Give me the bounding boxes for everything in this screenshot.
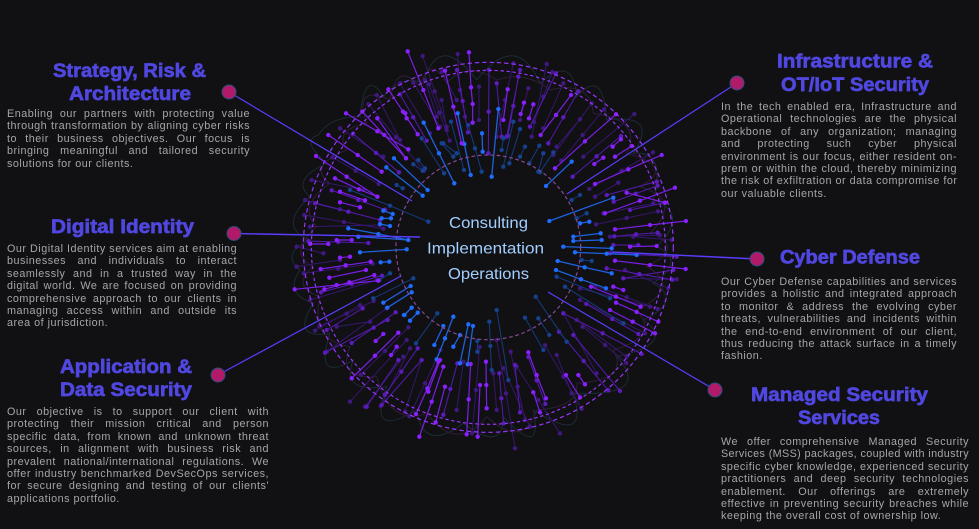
text: Cyber Defense description: fashion. — [721, 350, 763, 362]
text: Application description — [7, 406, 269, 505]
connector: Digital Identity — [234, 234, 420, 237]
text: Infrastructure description: backbone of any organization; managing — [721, 126, 957, 138]
node: Managed Security — [708, 383, 722, 397]
text: Digital Identity description: seamlessly and in a trusted way in the — [7, 268, 237, 280]
text: Application description: prevalent national/international regulations. We — [7, 456, 269, 468]
text: Infrastructure description: the risk of exfiltration or data compromise for — [721, 175, 958, 187]
dashed rings — [303, 62, 673, 432]
connector: Application & Data Security — [218, 276, 401, 375]
connector: Infrastructure & OT/IoT Security — [567, 83, 737, 194]
text: Application description: protecting their mission critical and person — [7, 418, 269, 430]
text: Strategy description: to their business objectives. Our focus is — [7, 133, 250, 145]
center labels: Implementation — [427, 240, 544, 258]
center labels: Operations — [448, 266, 529, 283]
text: Digital Identity description: businesses and individuals to interact — [7, 255, 237, 267]
text: Infrastructure description: environment is our focus, either resident on- — [721, 151, 957, 163]
heading: Managed Security Services: Services — [798, 407, 880, 429]
text: Infrastructure description: our valuable clients. — [721, 188, 827, 200]
node: Application — [211, 368, 225, 382]
connector: Cyber Defense — [612, 252, 757, 259]
text: Strategy description: through transformation by aligning cyber risks — [7, 120, 250, 132]
text: Strategy description: Enabling our partners with protecting value — [7, 108, 250, 120]
text: Application description: Our objective is to support our client with — [7, 406, 269, 418]
node: Infrastructure — [730, 76, 744, 90]
bright blue inner spokes — [348, 109, 637, 364]
text: Strategy description: solutions for our clients. — [7, 158, 133, 170]
radial spoke graphic — [292, 51, 686, 448]
dim blue inner spokes — [350, 122, 623, 380]
text: Infrastructure description: and protecting such cyber physical — [721, 138, 957, 150]
text: Strategy description — [7, 108, 250, 170]
heading: Cyber Defense: Cyber Defense — [780, 246, 920, 268]
heading: Application & Data Security: Data Security — [60, 379, 192, 401]
text: Cyber Defense description: thus reducing the attack surface in a timely — [721, 338, 957, 350]
text: Infrastructure description — [721, 101, 958, 200]
text: Infrastructure description: Operational technologies are the physical — [721, 113, 957, 125]
text: Cyber Defense description: to monitor & address the evolving cyber — [721, 301, 957, 313]
center labels — [427, 215, 544, 283]
text: Digital Identity description: digital world. We are focused on providing — [7, 280, 237, 292]
heading: Strategy, Risk & Architecture: Architecture — [69, 83, 191, 105]
heading: Infrastructure & OT/IoT Security: OT/IoT Security — [781, 74, 929, 96]
text: Digital Identity description: Our Digital Identity services aim at enabling — [7, 243, 237, 255]
text: Cyber Defense description: Our Cyber Defense capabilities and services — [721, 276, 957, 288]
text: Cyber Defense description: the end-to-end environment of our client, — [721, 326, 957, 338]
text: Application description: for secure designing and testing of our clients' — [7, 480, 269, 492]
heading: Strategy, Risk & Architecture: Strategy, Risk & — [53, 60, 206, 82]
text: Application description: specific data, from known and unknown threat — [7, 431, 269, 443]
text: Infrastructure description: In the tech enabled era, Infrastructure and — [721, 101, 957, 113]
heading: Managed Security Services: Managed Security — [751, 384, 928, 406]
text: Application description: offer industry benchmarked DevSecOps services, — [7, 468, 269, 480]
heading: Application & Data Security — [60, 356, 192, 401]
wavy outlines — [292, 56, 673, 437]
heading: Infrastructure & OT/IoT Security: Infrastructure & — [777, 50, 933, 72]
text: Digital Identity description: area of jurisdiction. — [7, 317, 108, 329]
text: Managed Security description: effective in preventing security breaches while — [721, 498, 969, 510]
heading: Managed Security Services — [751, 384, 928, 429]
text: Cyber Defense description — [721, 276, 957, 362]
text: Strategy description: bringing meaningful and tailored security — [7, 145, 250, 157]
text: Managed Security description: keeping the overall cost of ownership low. — [721, 510, 941, 522]
node: Cyber Defense — [750, 252, 764, 266]
heading: Application & Data Security: Application & — [60, 356, 192, 378]
text: Digital Identity description: comprehensive approach to our clients in — [7, 293, 237, 305]
text: Application description: sources, in alignment with business risk and — [7, 443, 269, 455]
text: Managed Security description — [721, 436, 969, 522]
text: Managed Security description: Services (MSS) packages, coupled with industry — [721, 448, 969, 460]
heading: Digital Identity: Digital Identity — [51, 216, 194, 238]
connector: Strategy, Risk & Architecture — [229, 92, 412, 201]
text: Application description: applications portfolio. — [7, 493, 120, 505]
text: Managed Security description: practitioners and deep security technologies — [721, 473, 969, 485]
connector: Managed Security Services — [548, 292, 715, 390]
dim outer spokes — [297, 54, 677, 448]
mid purple spokes — [308, 70, 677, 423]
text: Managed Security description: enablement. Our offerings are extremely — [721, 486, 969, 498]
text: Digital Identity description: managing access within and outside its — [7, 305, 237, 317]
text: Infrastructure description: prem or within the cloud, thereby minimizing — [721, 163, 957, 175]
node: Strategy — [222, 85, 236, 99]
heading: Strategy, Risk & Architecture — [53, 60, 206, 105]
text: Cyber Defense description: threats, vulnerabilities and incidents within — [721, 313, 957, 325]
center labels: Consulting — [449, 215, 528, 232]
text: Cyber Defense description: provides a holistic and integrated approach — [721, 288, 957, 300]
text: Managed Security description: specific cyber knowledge, experienced security — [721, 461, 969, 473]
text: Managed Security description: We offer comprehensive Managed Security — [721, 436, 969, 448]
text: Digital Identity description — [7, 243, 237, 329]
heading: Infrastructure & OT/IoT Security — [777, 50, 933, 96]
node: Digital Identity — [227, 226, 241, 240]
bright purple spokes — [295, 51, 686, 437]
